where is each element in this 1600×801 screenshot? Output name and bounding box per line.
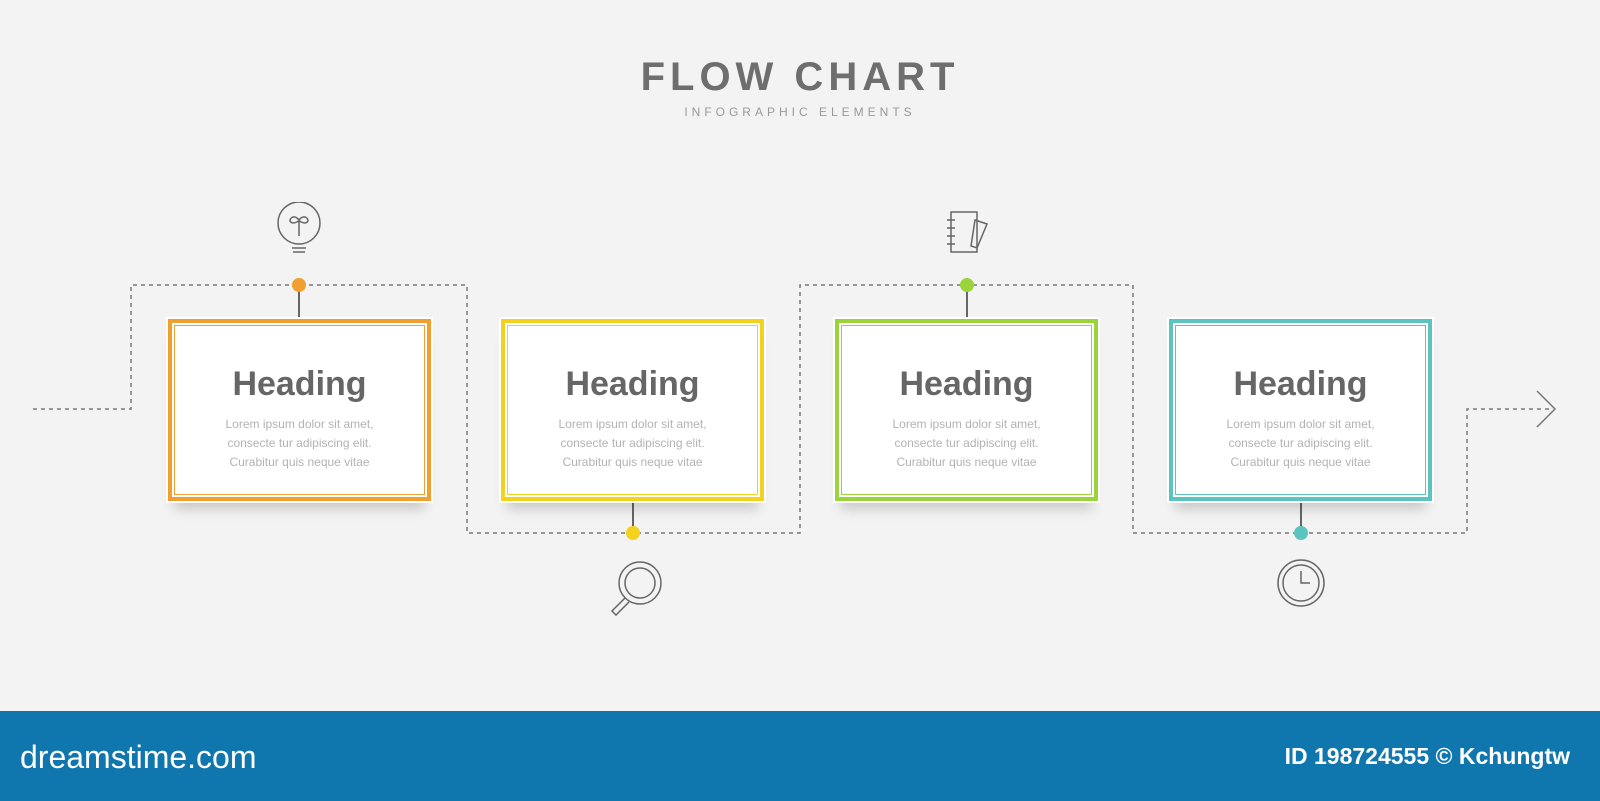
card 4: Curabitur quis neque vitae	[1230, 455, 1371, 469]
card 4: consecte tur adipiscing elit.	[1228, 436, 1373, 450]
card 1: consecte tur adipiscing elit.	[227, 436, 372, 450]
footer id: ID 198724555 © Kchungtw	[1285, 743, 1570, 769]
card 3: Heading	[899, 365, 1034, 403]
footer bar	[0, 711, 1600, 801]
card 4	[1169, 319, 1432, 501]
card 2: consecte tur adipiscing elit.	[560, 436, 705, 450]
card 3: Curabitur quis neque vitae	[896, 455, 1037, 469]
card 3: consecte tur adipiscing elit.	[894, 436, 1039, 450]
icon: notebook	[947, 211, 988, 253]
icon: magnifier	[611, 561, 662, 616]
card 4: Lorem ipsum dolor sit amet,	[1226, 417, 1375, 431]
card 2: Heading	[565, 365, 700, 403]
card 4: Heading	[1233, 365, 1368, 403]
card 1: Lorem ipsum dolor sit amet,	[225, 417, 374, 431]
icon: light bulb	[277, 202, 321, 253]
icon: clock	[1277, 559, 1325, 607]
subtitle: INFOGRAPHIC ELEMENTS	[684, 105, 916, 119]
card 1: Heading	[232, 365, 367, 403]
card 3	[835, 319, 1098, 501]
title: FLOW CHART	[641, 55, 959, 99]
card 3: Lorem ipsum dolor sit amet,	[892, 417, 1041, 431]
card 1	[168, 319, 431, 501]
card 2: Curabitur quis neque vitae	[562, 455, 703, 469]
card 2: Lorem ipsum dolor sit amet,	[558, 417, 707, 431]
footer logo: dreamstime.com	[20, 739, 256, 775]
card 2	[501, 319, 764, 501]
card 1: Curabitur quis neque vitae	[229, 455, 370, 469]
